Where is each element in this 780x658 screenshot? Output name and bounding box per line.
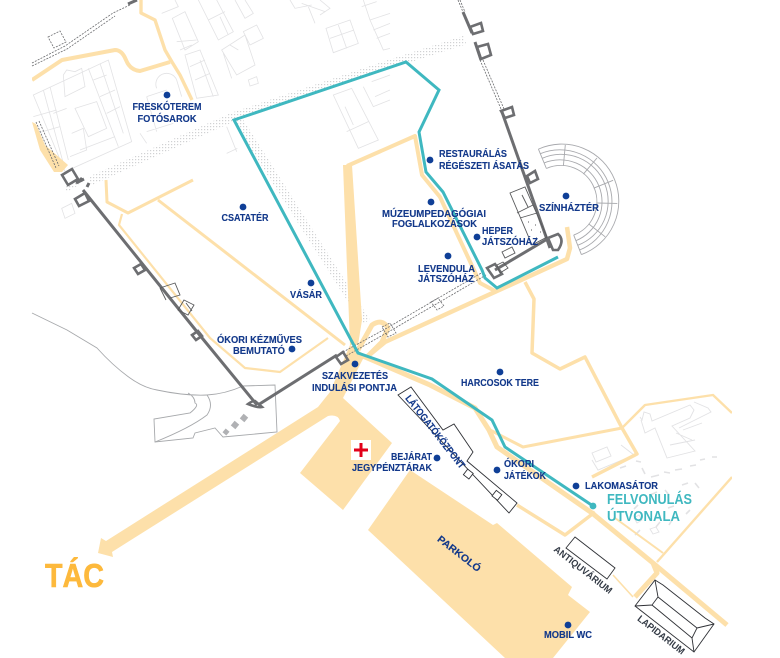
label: Levendula: LEVENDULA — [418, 264, 475, 275]
label: Ókori játékok: JÁTÉKOK — [504, 469, 547, 482]
label: Mobil WC — [544, 622, 592, 641]
parking area — [368, 470, 590, 658]
label: Freskóterem — [132, 92, 202, 125]
label: Szakvezetés: INDULÁSI PONTJA — [312, 381, 397, 394]
label: Heper — [474, 226, 538, 248]
label: Freskóterem: FRESKÓTEREM — [132, 100, 202, 113]
grey outline area — [32, 313, 277, 442]
small buildings at wall — [160, 187, 547, 315]
route end point — [590, 503, 596, 509]
label: Csatatér — [222, 204, 269, 224]
label: Harcosok tere: HARCOSOK TERE — [461, 378, 539, 389]
label: Parkoló: PARKOLÓ — [435, 532, 484, 575]
stippled wall line — [65, 40, 465, 322]
label: route title — [607, 491, 692, 525]
label: Látogatóközpont: LÁTOGATÓKÖZPONT — [403, 392, 468, 471]
label: Szakvezetés — [312, 361, 397, 394]
label: Vásár — [290, 280, 323, 301]
label: Restaurálás — [427, 147, 529, 172]
label: Ókori kézműves: BEMUTATÓ — [233, 344, 285, 357]
procession route — [234, 62, 593, 506]
faint ruins: south-east — [592, 402, 717, 535]
label: route title: FELVONULÁS — [607, 491, 692, 508]
label: Levendula — [418, 253, 475, 285]
label: Harcosok tere — [461, 369, 539, 389]
building: visitor centre — [398, 387, 517, 513]
label: Múzeumpedagógiai: FOGLALKOZÁSOK — [392, 217, 478, 230]
label: Heper: JÁTSZÓHÁZ — [482, 235, 538, 248]
label: Bejárat: JEGYPÉNZTÁRAK — [352, 461, 433, 474]
label: route title: ÚTVONALA — [607, 507, 680, 525]
grey squares — [222, 414, 248, 436]
label: Restaurálás: RÉGÉSZETI ÁSATÁS — [439, 159, 529, 172]
label: Vásár: VÁSÁR — [290, 288, 323, 301]
label: Ókori kézműves — [217, 333, 302, 357]
city walls and towers — [62, 0, 562, 407]
theatre seating — [538, 144, 619, 255]
red cross — [351, 440, 371, 460]
label: Lakomasátor: LAKOMASÁTOR — [585, 479, 659, 492]
label: Freskóterem: FOTÓSAROK — [138, 112, 197, 125]
label: Levendula: JÁTSZÓHÁZ — [418, 272, 474, 285]
label: Múzeumpedagógiai: MÚZEUMPEDAGÓGIAI — [382, 207, 486, 220]
TÁC arrow road — [98, 345, 392, 557]
label: Ókori kézműves: ÓKORI KÉZMŰVES — [217, 333, 302, 346]
label: Restaurálás: RESTAURÁLÁS — [439, 147, 507, 160]
label: Csatatér: CSATATÉR — [222, 211, 269, 224]
building: lapidarium — [635, 580, 714, 652]
label: Múzeumpedagógiai — [382, 199, 486, 230]
label: Lakomasátor — [573, 479, 659, 492]
label: Heper: HEPER — [482, 226, 514, 237]
building: antiquarium — [566, 537, 615, 579]
label: Mobil WC: MOBIL WC — [544, 630, 592, 641]
label: Szakvezetés: SZAKVEZETÉS — [322, 369, 388, 382]
label: Színháztér: SZÍNHÁZTÉR — [539, 201, 600, 214]
label: Lapidarium: LAPIDARIUM — [635, 614, 687, 657]
label: Bejárat: BEJÁRAT — [391, 450, 432, 463]
label: Ókori játékok — [494, 457, 547, 482]
dashed wall traces — [32, 0, 504, 356]
label: Antiquvárium: ANTIQUVÁRIUM — [551, 544, 614, 597]
label: Tác: TÁC — [45, 557, 104, 594]
label: Színháztér — [539, 193, 600, 214]
small rooms in visitor centre — [463, 469, 502, 500]
label: Bejárat — [352, 450, 440, 474]
label: Ókori játékok: ÓKORI — [504, 457, 534, 470]
faint ruins: north-west — [33, 0, 390, 218]
